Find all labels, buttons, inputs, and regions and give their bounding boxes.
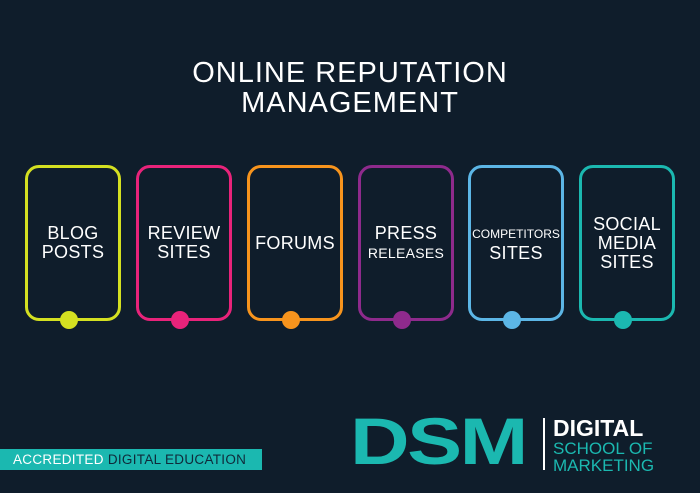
dot bbox=[60, 311, 78, 329]
panel: social media sites bbox=[579, 165, 675, 321]
panel: review sites bbox=[136, 165, 232, 321]
panel: blog posts bbox=[25, 165, 121, 321]
dot bbox=[282, 311, 300, 329]
panel: blog posts: POSTS bbox=[42, 242, 104, 262]
panel: social media sites: SITES bbox=[600, 252, 654, 272]
panel: forums bbox=[247, 165, 343, 321]
panel: press releases bbox=[358, 165, 454, 321]
panel: competitors sites: COMPETITORS bbox=[472, 227, 560, 241]
title bbox=[192, 57, 508, 119]
panel: competitors sites: SITES bbox=[489, 243, 543, 263]
panel: blog posts: BLOG bbox=[47, 223, 99, 243]
dot bbox=[393, 311, 411, 329]
panel: social media sites: MEDIA bbox=[598, 232, 656, 252]
panel: review sites: SITES bbox=[157, 242, 211, 262]
panel: press releases: PRESS bbox=[375, 222, 437, 242]
panel: competitors sites bbox=[468, 165, 564, 321]
logo divider bbox=[543, 418, 545, 470]
panel: press releases: RELEASES bbox=[368, 244, 444, 260]
badge: accredited digital education bbox=[0, 449, 262, 470]
panel: review sites: REVIEW bbox=[148, 223, 220, 243]
logo text: DIGITAL bbox=[553, 415, 643, 441]
dot bbox=[171, 311, 189, 329]
panel: forums: FORUMS bbox=[255, 232, 335, 252]
logo text: MARKETING bbox=[553, 456, 654, 475]
badge: accredited digital education: ACCREDITED DIGITAL EDUCATION bbox=[13, 452, 246, 467]
dot bbox=[503, 311, 521, 329]
panel: social media sites: SOCIAL bbox=[593, 214, 661, 234]
logo text: SCHOOL OF bbox=[553, 439, 652, 458]
title: MANAGEMENT bbox=[241, 87, 459, 119]
dot bbox=[614, 311, 632, 329]
logo: DSM: DSM bbox=[350, 404, 526, 478]
logo text bbox=[553, 415, 654, 475]
title: ONLINE REPUTATION bbox=[192, 57, 508, 89]
